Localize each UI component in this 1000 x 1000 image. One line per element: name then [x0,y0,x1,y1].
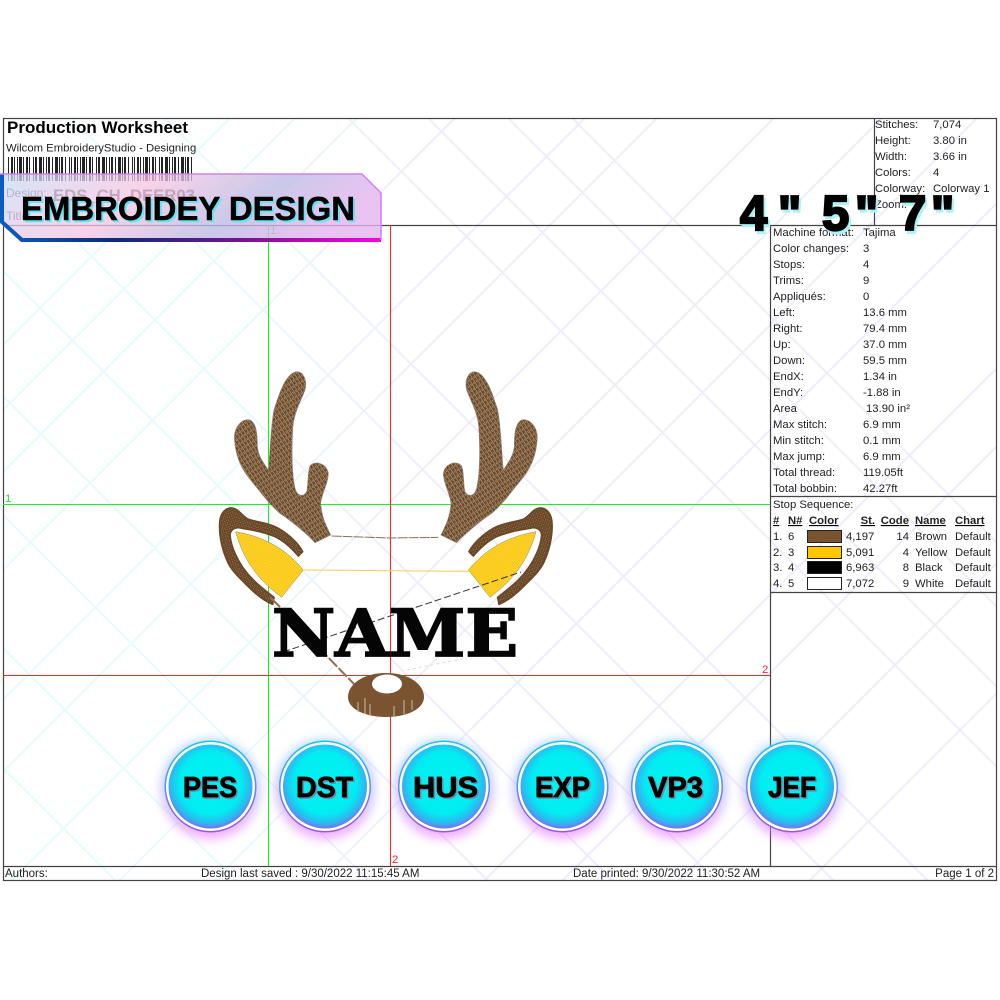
panel: machine statistics [773,227,910,495]
panel: machine statistics: 42.27ft [863,483,898,495]
panel: machine statistics: 0 [863,291,869,303]
crosshair guides [3,225,770,866]
banner: embroidery design [0,174,381,242]
design name: EDS_CH_DEER03 [53,186,195,205]
panel: machine statistics: Machine format: [773,227,854,239]
design name: Design: [6,186,47,200]
size labels: 4 5 7 inches: 4 [742,190,769,244]
panel: machine statistics: Min stitch: [773,435,824,447]
panel: stop sequence table: 6 [788,531,794,543]
panel: machine statistics: 13.6 mm [863,307,907,319]
stats box: design summary: Colors: [875,167,911,179]
panel: machine statistics: EndX: [773,371,804,383]
crosshair guides: 2 [762,664,768,676]
panel: machine statistics: 6.9 mm [863,451,901,463]
panel: machine statistics: Max jump: [773,451,825,463]
stats box: design summary [875,119,990,211]
format button: VP3: VP3 [648,772,703,804]
panel: machine statistics: Right: [773,323,803,335]
panel: stop sequence table: 5 [788,578,794,590]
format button: DST: DST [298,774,355,806]
icon: left ear [220,508,303,604]
panel: stop sequence table: Default [955,562,992,574]
panel: machine statistics: Stops: [773,259,805,271]
size labels: 4 5 7 inches: " [933,190,956,244]
reindeer embroidery design [220,372,552,604]
panel: stop sequence table: 3 [788,547,794,559]
panel: machine statistics: Up: [773,339,791,351]
panel: stop sequence table: Brown [915,531,947,543]
crosshair guides: 2 [392,854,398,866]
panel: stop sequence table: 7,072 [846,578,874,590]
panel: stop sequence table: 4 [788,562,794,574]
panel: machine statistics: Left: [773,307,795,319]
footer: Design last saved : 9/30/2022 11:15:45 AM [201,868,419,880]
banner: embroidery design: EMBROIDEY DESIGN [23,193,357,230]
size labels: 4 5 7 inches [740,187,956,244]
header: production worksheet title: Production Worksheet [7,118,188,137]
footer [5,868,994,880]
format button: EXP: EXP [535,772,590,804]
format button: JEF [742,739,842,839]
format button: DST [275,739,375,839]
panel: machine statistics: 1.34 in [863,371,897,383]
panel: stop sequence table: Color [809,515,839,527]
size labels: 4 5 7 inches: 4 [740,187,767,241]
panel: stop sequence table: Code [881,515,909,527]
panel: machine statistics: 4 [863,259,869,271]
format button: JEF: JEF [770,774,818,806]
size labels: 4 5 7 inches: " [780,190,803,244]
stats box: design summary: 4 [933,167,939,179]
panel: machine statistics: 37.0 mm [863,339,907,351]
panel: stop sequence table: 3. [773,562,782,574]
header: software name: Wilcom EmbroideryStudio - Designing [6,142,196,154]
panel: machine statistics: 119.05ft [863,467,904,479]
footer: Authors: [5,868,48,880]
footer: Page 1 of 2 [935,868,994,880]
format button: HUS: HUS [414,774,480,806]
format button: HUS [394,739,494,839]
icon: nose [348,673,424,717]
panel: machine statistics: 79.4 mm [863,323,907,335]
panel: stop sequence table: 8 [903,562,909,574]
footer: Date printed: 9/30/2022 11:30:52 AM [573,868,760,880]
crosshair guides: 1 [270,225,276,237]
size labels: 4 5 7 inches: " [778,187,801,241]
panel: stop sequence table: 14 [896,531,909,543]
format button: VP3: VP3 [650,774,704,806]
stats box: design summary: Stitches: [875,119,918,131]
panel: stop sequence table: Name [915,515,946,527]
panel: machine statistics: Color changes: [773,243,849,255]
size labels: 4 5 7 inches: 7 [899,187,926,241]
panel: stop sequence table: Default [955,531,992,543]
panel: stop sequence table: 6,963 [846,562,874,574]
panel: stop sequence table: 4,197 [846,531,874,543]
panel: machine statistics: Area [773,403,798,415]
barcode [8,157,194,181]
format button: VP3 [627,739,727,839]
jump stitches around name [270,572,521,685]
size labels: 4 5 7 inches: 5 [824,190,851,244]
size labels: 4 5 7 inches: 7 [901,190,928,244]
panel: stop sequence table: Yellow [915,547,948,559]
worksheet frame [3,118,997,880]
panel: machine statistics: 13.90 in² [866,403,910,415]
stats box: design summary: Colorway: [875,183,925,195]
title label: Title: [6,209,32,223]
size labels: 4 5 7 inches: 5 [822,187,849,241]
panel: machine statistics: Down: [773,355,805,367]
panel: stop sequence table: Chart [955,515,985,527]
format button: DST: DST [296,772,353,804]
format button: PES: PES [184,774,238,806]
format button: PES [160,739,260,839]
panel: machine statistics: Max stitch: [773,419,827,431]
crosshair guides: 1 [5,493,11,505]
panel: machine statistics: 9 [863,275,869,287]
panel: stop sequence table: Default [955,578,992,590]
stats box: design summary: 3.80 in [933,135,967,147]
banner: embroidery design: EMBROIDEY DESIGN [21,191,355,228]
panel: machine statistics: Appliqués: [773,291,826,303]
format button: EXP [512,739,612,839]
background lattice pattern [0,118,1000,881]
panel: stop sequence table [773,499,992,590]
icon: left antler [234,372,331,543]
format button: JEF: JEF [768,772,816,804]
panel: machine statistics: 59.5 mm [863,355,907,367]
panel: machine statistics: Total bobbin: [773,483,837,495]
stats box: design summary: 7,074 [933,119,961,131]
panel: machine statistics: 6.9 mm [863,419,901,431]
panel: stop sequence table: Stop Sequence: [773,499,853,511]
size labels: 4 5 7 inches: " [931,187,954,241]
panel: stop sequence table: St. [861,515,875,527]
icon: right antler [441,372,537,543]
panel: stop sequence table: # [773,515,780,527]
name text: NAME [272,596,518,672]
panel: machine statistics: 0.1 mm [863,435,901,447]
size labels: 4 5 7 inches: " [855,187,878,241]
format button: HUS: HUS [413,772,478,804]
panel: stop sequence table: Black [915,562,943,574]
icon: right ear [468,508,552,604]
panel: machine statistics: Total thread: [773,467,835,479]
panel: machine statistics: 3 [863,243,869,255]
size labels: 4 5 7 inches: " [857,190,880,244]
stats box: design summary: Width: [875,151,907,163]
panel: stop sequence table: 4. [773,578,782,590]
panel: stop sequence table: 5,091 [846,547,874,559]
panel: stop sequence table: Default [955,547,992,559]
stats box: design summary: 3.66 in [933,151,967,163]
panel: stop sequence table: 1. [773,531,782,543]
stats box: design summary: Height: [875,135,911,147]
format button: PES: PES [183,772,237,804]
stats box: design summary: Zoom: [875,199,907,211]
panel: stop sequence table: White [915,578,944,590]
panel: machine statistics: EndY: [773,387,803,399]
panel: stop sequence table: 4 [903,547,909,559]
panel: machine statistics: Tajima [863,227,896,239]
panel: machine statistics: -1.88 in [863,387,901,399]
panel: stop sequence table: N# [788,515,803,527]
stats box: design summary: Colorway 1 [933,183,990,195]
format button: EXP: EXP [536,774,592,806]
jump stitch lines [304,536,470,571]
panel: machine statistics: Trims: [773,275,804,287]
panel: stop sequence table: 9 [903,578,909,590]
panel: stop sequence table: 2. [773,547,782,559]
